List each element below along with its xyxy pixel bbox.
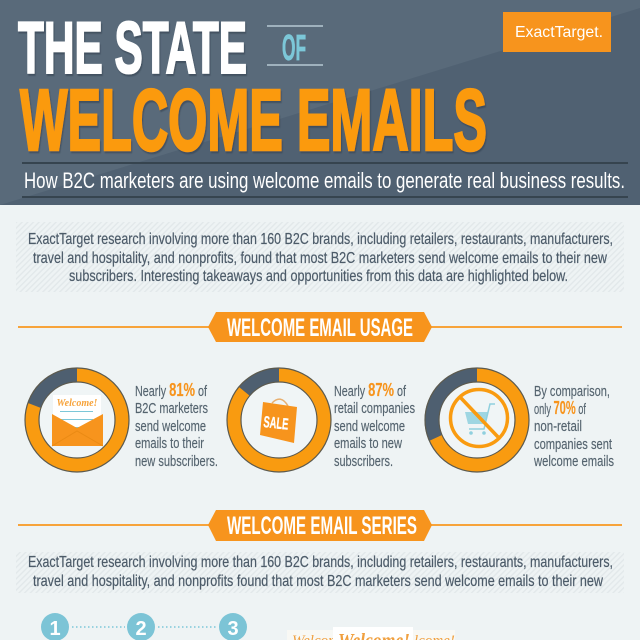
heading: welcome email series: WELCOME EMAIL SERIES (227, 512, 417, 540)
icon: welcome envelope: Welcome! (57, 398, 98, 409)
icon: sale bag: SALE (263, 414, 289, 434)
heading: welcome email usage (18, 312, 622, 342)
text: 87 percent: emails to new (334, 435, 402, 452)
text: 87 percent: send welcome (334, 418, 405, 435)
step 1 (41, 613, 69, 640)
text: 81 percent (135, 380, 218, 470)
text: 87 percent (334, 380, 415, 470)
title: Of: OF (282, 27, 306, 68)
text: 87 percent: subscribers. (334, 453, 393, 470)
step 1: 1 (49, 618, 61, 640)
text: 70 percent (533, 383, 614, 470)
title: Of (267, 25, 323, 68)
step 3: 3 (227, 618, 239, 640)
step 3 (219, 613, 247, 640)
logo: ExactTarget: ExactTarget. (515, 24, 603, 41)
step 2: 2 (135, 618, 147, 640)
panel: header (0, 0, 640, 205)
series text block (16, 552, 624, 593)
text: 87 percent: retail companies (334, 400, 415, 417)
heading: welcome email series (18, 510, 622, 541)
welcome email cards (287, 627, 455, 640)
text: 81 percent: emails to their (135, 435, 204, 452)
text: 70 percent: companies sent (534, 436, 613, 453)
icon: no shopping cart (450, 390, 508, 446)
heading: welcome email usage: WELCOME EMAIL USAGE (227, 314, 413, 342)
text: 81 percent: B2C marketers (135, 400, 208, 417)
donut: 81 percent (25, 368, 129, 472)
text: 70 percent: non-retail (534, 418, 582, 435)
intro text block (16, 222, 624, 292)
series steps (41, 613, 247, 640)
title: The State: THE STATE (18, 8, 247, 89)
logo: ExactTarget (503, 12, 611, 52)
step 2 (127, 613, 155, 640)
donut: 70 percent (425, 368, 529, 472)
text: 87 percent: Nearly 87% of (334, 380, 407, 400)
text: 81 percent: send welcome (135, 418, 206, 435)
text: 70 percent: only 70% of (534, 398, 587, 418)
text: 81 percent: Nearly 81% of (135, 380, 208, 400)
donut: 87 percent (227, 368, 331, 472)
text: 70 percent: welcome emails (533, 453, 614, 470)
text: 81 percent: new subscribers. (135, 453, 218, 470)
text: 70 percent: By comparison, (534, 383, 610, 400)
